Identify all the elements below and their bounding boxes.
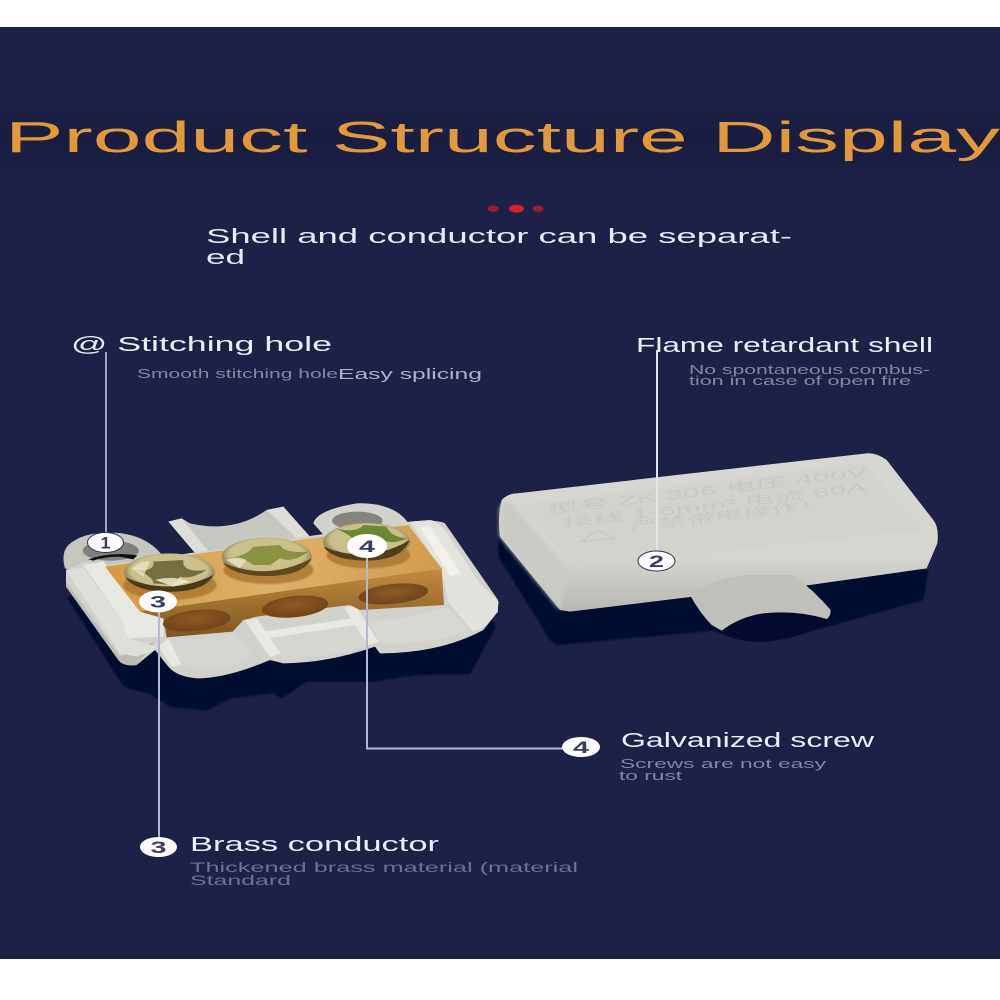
label: brass conductor: Thickened brass material (material	[190, 859, 578, 875]
subtitle	[206, 226, 792, 269]
right rim	[410, 520, 482, 587]
tab opening shadow	[721, 614, 826, 642]
right rim groove	[420, 527, 461, 576]
label: brass conductor: Standard	[190, 872, 291, 888]
cover body	[499, 453, 938, 612]
left rim	[83, 561, 164, 638]
label: flame retardant shell	[636, 335, 933, 388]
leader line 2	[656, 350, 658, 552]
badge 4 callout	[562, 737, 600, 757]
label: stitching hole: Smooth stitching hole	[137, 366, 338, 381]
screw shadows	[123, 542, 410, 600]
connector shadow	[67, 590, 496, 711]
badge 1	[88, 532, 124, 552]
badge 3 callout: 3	[150, 838, 166, 857]
red dots	[488, 205, 544, 213]
left hole tab	[63, 533, 161, 575]
badge 4 callout: 4	[573, 738, 590, 757]
label: brass conductor: Brass conductor	[190, 834, 440, 856]
right connector cover	[498, 453, 938, 645]
title shadow smudge	[0, 102, 1000, 182]
label: flame retardant shell: tion in case of open fire	[689, 373, 911, 388]
badge 3 on brass	[139, 590, 177, 612]
badge 4 on screw	[347, 534, 387, 558]
badge 3 on brass: 3	[150, 592, 166, 612]
label: flame retardant shell: No spontaneous combus-	[689, 362, 930, 377]
housing lower side shading	[66, 582, 155, 665]
label: stitching hole: @ Stitching hole	[71, 334, 332, 356]
embossed marking text: 型号 ZK 306 电压 400V	[547, 465, 868, 517]
scallop ridges	[158, 606, 378, 667]
brass top face	[105, 525, 442, 612]
badge 4 on screw: 4	[359, 537, 376, 556]
leader line 1	[105, 352, 107, 533]
label: flame retardant shell: Flame retardant shell	[636, 335, 933, 357]
leader line 4	[367, 556, 565, 748]
badge 3 callout	[140, 837, 177, 857]
scallop 2	[267, 623, 368, 657]
title: Product Structure Display	[5, 113, 1000, 162]
embossed marking text: 严禁带电操作！	[630, 496, 828, 534]
label: galvanized screw: to rust	[619, 768, 683, 783]
scallop 3	[368, 607, 470, 643]
embossed marking text: 接线 1-6mm² 电流 60A	[563, 479, 867, 530]
galvanized screws	[124, 523, 410, 592]
cover shadow	[498, 537, 928, 645]
cover left face shade	[500, 500, 570, 610]
white housing body	[66, 521, 498, 678]
subtitle: ed	[206, 247, 245, 269]
right post	[445, 577, 499, 632]
scallop 1	[168, 633, 253, 670]
left rim shade	[66, 567, 157, 657]
label: galvanized screw: Screws are not easy	[620, 756, 827, 771]
warning triangle embossing	[582, 530, 614, 542]
subtitle: Shell and conductor can be separat-	[206, 226, 792, 248]
label: brass conductor	[190, 834, 578, 888]
label: stitching hole: Easy splicing	[338, 366, 482, 383]
brass conductor holes	[162, 580, 429, 635]
label: galvanized screw	[619, 730, 875, 783]
brass front face	[140, 568, 444, 637]
embossed marking text	[547, 465, 871, 543]
badge 2	[638, 551, 675, 571]
leader line 3	[158, 612, 160, 838]
back centre tab	[168, 507, 310, 555]
cover top highlight	[520, 463, 923, 567]
label: stitching hole	[71, 334, 482, 383]
badge 2: 2	[649, 552, 664, 571]
cover cable tab	[690, 575, 831, 631]
badge 1: 1	[100, 534, 110, 552]
left connector base with brass conductor	[63, 503, 499, 711]
back centre tab ridges	[168, 507, 309, 555]
right hole tab	[313, 503, 408, 538]
label: galvanized screw: Galvanized screw	[621, 730, 875, 752]
